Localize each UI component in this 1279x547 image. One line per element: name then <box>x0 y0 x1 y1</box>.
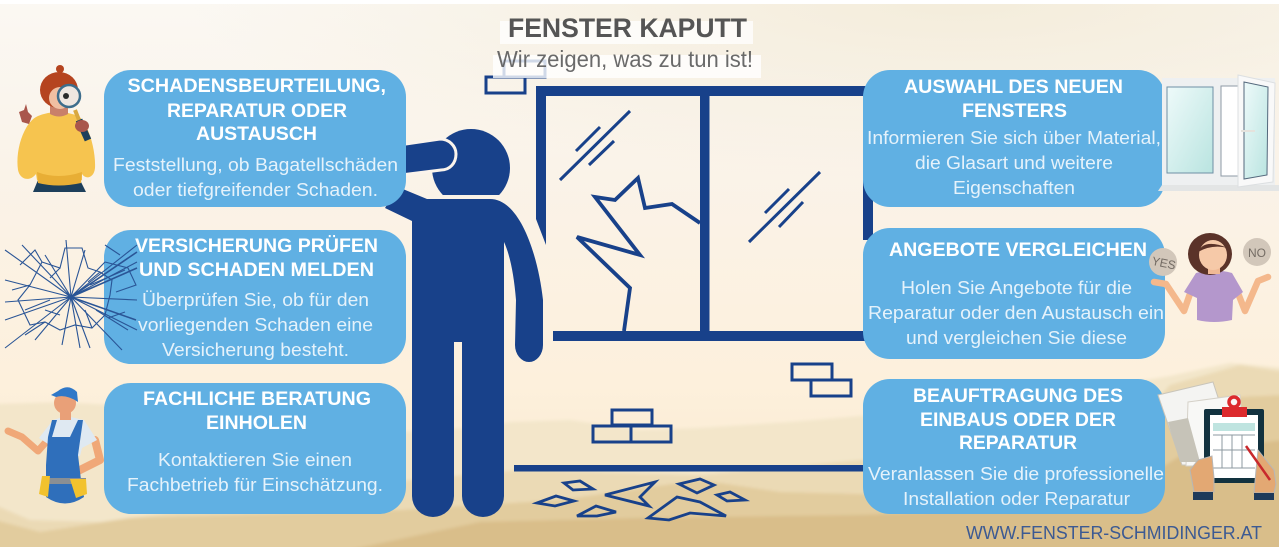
icon: undecided woman with yes and no bubbles <box>1149 233 1271 322</box>
icon: craftsman in overalls <box>8 387 100 504</box>
panel: Schadensbeurteilung: AUSTAUSCH <box>196 123 317 145</box>
panel: Beauftragung <box>863 379 1165 514</box>
icon: undecided woman with yes and no bubbles: YES <box>1151 254 1177 273</box>
glass shards on the floor <box>537 479 745 520</box>
person figure looking at window <box>385 129 543 517</box>
panel: Schadensbeurteilung: SCHADENSBEURTEILUNG, <box>128 75 386 97</box>
panel: Auswahl des neuen Fensters <box>863 70 1165 207</box>
title <box>493 13 761 78</box>
title: Wir zeigen, was zu tun ist! <box>497 46 753 72</box>
broken glass outline <box>577 178 700 331</box>
panel: Fachliche Beratung: EINHOLEN <box>206 412 307 434</box>
icon: cracked glass <box>5 240 137 350</box>
panel: Versicherung: Überprüfen Sie, ob für den <box>142 290 369 310</box>
panel: Schadensbeurteilung: oder tiefgreifender Schaden. <box>133 180 378 200</box>
panel: Versicherung: VERSICHERUNG PRÜFEN <box>135 234 378 257</box>
scattered bricks <box>486 61 851 442</box>
panel: Beauftragung: Installation oder Reparatur <box>903 489 1130 509</box>
icon: woman with magnifying glass <box>17 65 95 192</box>
panel: Fachliche Beratung <box>104 383 406 514</box>
icon: new window <box>1158 75 1279 191</box>
panel: Schadensbeurteilung: REPARATUR ODER <box>167 100 347 122</box>
panel: Angebote vergleichen: Holen Sie Angebote für die <box>901 278 1132 298</box>
panel: Angebote vergleichen: ANGEBOTE VERGLEICHEN <box>889 239 1147 261</box>
panel: Beauftragung: REPARATUR <box>959 432 1077 454</box>
panel: Auswahl des neuen Fensters: Informieren Sie sich über Material, <box>867 128 1161 148</box>
panel: Fachliche Beratung: Fachbetrieb für Einschätzung. <box>127 475 383 495</box>
panel: Angebote vergleichen: und vergleichen Sie diese <box>906 328 1127 348</box>
title: FENSTER KAPUTT <box>508 13 747 43</box>
panel: Schadensbeurteilung <box>104 70 406 207</box>
panel: Auswahl des neuen Fensters: FENSTERS <box>962 100 1067 122</box>
panel: Angebote vergleichen: Reparatur oder den Austausch ein <box>868 303 1164 323</box>
panel: Versicherung: vorliegenden Schaden eine <box>138 315 373 335</box>
panel: Angebote vergleichen <box>863 228 1165 359</box>
panel: Versicherung: UND SCHADEN MELDEN <box>139 259 374 281</box>
panel: Beauftragung: EINBAUS ODER DER <box>920 409 1116 431</box>
icon: undecided woman with yes and no bubbles: NO <box>1248 246 1266 260</box>
panel: Beauftragung: BEAUFTRAGUNG DES <box>913 385 1123 407</box>
panel: Versicherung <box>104 230 406 364</box>
panel: Schadensbeurteilung: Feststellung, ob Bagatellschäden <box>113 155 398 175</box>
panel: Versicherung: Versicherung besteht. <box>162 340 349 360</box>
panel: Auswahl des neuen Fensters: AUSWAHL DES NEUEN <box>904 76 1123 98</box>
panel: Fachliche Beratung: FACHLICHE BERATUNG <box>143 388 371 410</box>
panel: Beauftragung: Veranlassen Sie die professionelle <box>868 464 1164 484</box>
panel: Fachliche Beratung: Kontaktieren Sie einen <box>158 450 352 470</box>
window frame with broken pane <box>514 86 873 472</box>
panel: Auswahl des neuen Fensters: die Glasart und weitere <box>915 153 1113 173</box>
panel: Auswahl des neuen Fensters: Eigenschaften <box>953 178 1075 198</box>
icon: clipboard with documents and hands <box>1158 382 1276 500</box>
website url: WWW.FENSTER-SCHMIDINGER.AT <box>966 523 1262 543</box>
glass reflections <box>560 111 820 242</box>
